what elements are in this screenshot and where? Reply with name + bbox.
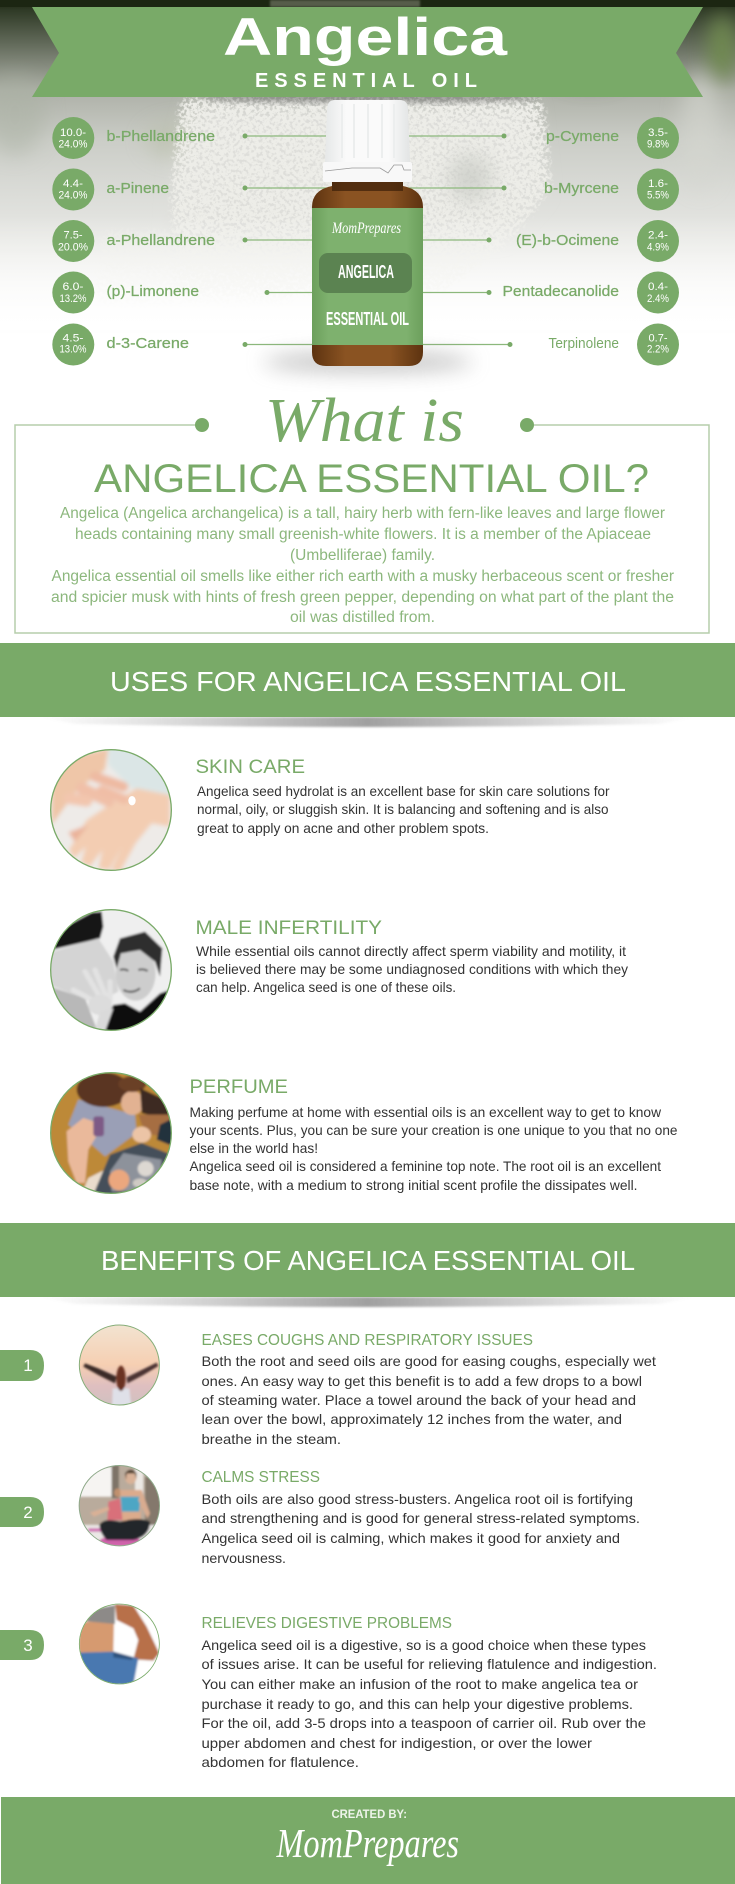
compound: p-Cymene: p-Cymene bbox=[546, 128, 619, 145]
icon: essential oil bottle bbox=[263, 100, 473, 372]
text: of steaming water. Place a towel around the back of your head and bbox=[202, 1393, 636, 1408]
compound: a-Pinene: 4.4- bbox=[63, 178, 83, 190]
description: and spicier musk with hints of fresh green pepper, depending on what part of the plant the bbox=[51, 589, 674, 606]
text: purchase it ready to go, and this can help your digestive problems. bbox=[202, 1697, 633, 1712]
use: male infertility bbox=[45, 905, 628, 1038]
use: perfume bbox=[45, 1068, 678, 1201]
compound: (E)-b-Ocimene: (E)-b-Ocimene bbox=[516, 232, 619, 249]
photo: hands applying cream bbox=[50, 749, 172, 871]
text: Angelica seed oil is a digestive, so is a good choice when these types bbox=[202, 1638, 646, 1653]
compound: p-Cymene: 3.5- bbox=[648, 127, 668, 139]
text bbox=[190, 1105, 678, 1193]
number tab 3 bbox=[0, 1630, 44, 1660]
compound: a-Phellandrene bbox=[52, 220, 215, 262]
connector lines bbox=[242, 134, 512, 347]
compound: (p)-Limonene: 6.0- bbox=[62, 281, 84, 293]
compound: b-Myrcene: 1.6- bbox=[648, 178, 668, 190]
compound: b-Phellandrene bbox=[52, 117, 215, 159]
description: oil was distilled from. bbox=[290, 609, 435, 626]
text: ones. An easy way to get this benefit is to add a few drops to a bowl bbox=[202, 1374, 642, 1389]
description: heads containing many small greenish-white flowers. It is a member of the Apiaceae bbox=[75, 526, 651, 543]
compound: (p)-Limonene: 13.2% bbox=[60, 293, 87, 305]
compound: Terpinolene: 0.7- bbox=[648, 332, 668, 344]
compound: (p)-Limonene bbox=[52, 272, 199, 314]
heading: MALE INFERTILITY bbox=[196, 917, 382, 939]
text: can help. Angelica seed is one of these oils. bbox=[196, 980, 456, 995]
compound: Pentadecanolide bbox=[502, 272, 679, 314]
compound: a-Phellandrene: a-Phellandrene bbox=[106, 232, 215, 249]
left compound list bbox=[52, 117, 215, 366]
text: and strengthening and is good for general stress-related symptoms. bbox=[202, 1511, 640, 1526]
compound: b-Phellandrene: b-Phellandrene bbox=[106, 128, 215, 145]
number tab 2 bbox=[0, 1497, 44, 1527]
number tab 3: 3 bbox=[23, 1636, 33, 1655]
text bbox=[202, 1354, 656, 1447]
compound: b-Phellandrene: 24.0% bbox=[58, 138, 88, 150]
heading: ANGELICA ESSENTIAL OIL? bbox=[94, 457, 649, 501]
compound: p-Cymene bbox=[546, 117, 679, 159]
compound: b-Myrcene bbox=[544, 168, 679, 210]
description: (Umbelliferae) family. bbox=[290, 547, 435, 564]
compound: Pentadecanolide: Pentadecanolide bbox=[502, 283, 619, 300]
compound: d-3-Carene: 13.0% bbox=[60, 344, 87, 356]
text bbox=[202, 1492, 640, 1566]
benefit 3: relieves digestive problems bbox=[0, 1603, 657, 1770]
flower cluster bbox=[90, 92, 558, 310]
text: your scents. Plus, you can be sure your creation is one unique to you that no one bbox=[190, 1123, 678, 1138]
text: Angelica seed oil is calming, which makes it good for anxiety and bbox=[202, 1531, 620, 1546]
section header: benefits bbox=[0, 1223, 735, 1307]
compound: b-Myrcene: b-Myrcene bbox=[544, 180, 619, 197]
text: You can either make an infusion of the root to make angelica tea or bbox=[202, 1677, 638, 1692]
text: normal, oily, or sluggish skin. It is balancing and softening and is also bbox=[197, 802, 608, 817]
photo: woman with perfume bbox=[50, 1072, 172, 1194]
compound: b-Myrcene: 5.5% bbox=[647, 190, 669, 202]
footer bbox=[1, 1797, 735, 1884]
compound: d-3-Carene: 4.5- bbox=[62, 332, 84, 344]
text: breathe in the steam. bbox=[202, 1432, 341, 1447]
bottle name plate bbox=[319, 253, 412, 293]
compound: Pentadecanolide: 0.4- bbox=[648, 281, 668, 293]
compound: a-Pinene bbox=[52, 168, 169, 210]
text bbox=[197, 784, 610, 836]
right compound list bbox=[502, 117, 679, 366]
use: skin care bbox=[45, 745, 610, 878]
bottle subtitle: ESSENTIAL OIL bbox=[326, 309, 409, 329]
photo: woman at sunrise bbox=[77, 1323, 163, 1407]
compound: (E)-b-Ocimene bbox=[516, 220, 679, 262]
photo: waist in loose jeans bbox=[77, 1603, 163, 1687]
text: For the oil, add 3-5 drops into a teaspoon of carrier oil. Rub over the bbox=[202, 1716, 646, 1731]
compound: a-Phellandrene: 7.5- bbox=[64, 230, 83, 242]
text: Angelica seed oil is considered a feminine top note. The root oil is an excellent bbox=[190, 1159, 661, 1174]
text: is believed there may be some undiagnosed conditions with which they bbox=[196, 962, 628, 977]
compound: d-3-Carene: d-3-Carene bbox=[106, 335, 189, 352]
compound: p-Cymene: 9.8% bbox=[647, 138, 669, 150]
benefit 1: eases coughs bbox=[0, 1323, 656, 1447]
section header: benefits: BENEFITS OF ANGELICA ESSENTIAL OIL bbox=[101, 1245, 635, 1276]
photo: man with pregnant partner bbox=[50, 909, 172, 1031]
compound: a-Pinene: a-Pinene bbox=[106, 180, 169, 197]
bottle name plate: ANGELICA bbox=[338, 261, 394, 282]
text: else in the world has! bbox=[190, 1141, 318, 1156]
benefit 2: calms stress bbox=[0, 1463, 640, 1566]
number tab 1 bbox=[0, 1350, 44, 1381]
text: nervousness. bbox=[202, 1551, 286, 1566]
text: While essential oils cannot directly affect sperm viability and motility, it bbox=[196, 944, 626, 959]
number tab 2: 2 bbox=[23, 1503, 33, 1522]
compound: a-Pinene: 24.0% bbox=[58, 190, 88, 202]
compound: Terpinolene bbox=[548, 324, 679, 366]
compound: (E)-b-Ocimene: 2.4- bbox=[648, 230, 668, 242]
compound: (E)-b-Ocimene: 4.9% bbox=[647, 242, 669, 254]
description bbox=[51, 505, 674, 626]
text: Both oils are also good stress-busters. Angelica root oil is fortifying bbox=[202, 1492, 633, 1507]
compound: Terpinolene: Terpinolene bbox=[548, 335, 619, 352]
script heading: What is bbox=[265, 387, 464, 455]
text bbox=[202, 1638, 657, 1770]
compound: a-Phellandrene: 20.0% bbox=[58, 242, 88, 254]
text: base note, with a medium to strong initial scent profile the dissipates well. bbox=[190, 1178, 638, 1193]
text: of issues arise. It can be useful for relieving flatulence and indigestion. bbox=[202, 1657, 657, 1672]
compound: d-3-Carene bbox=[52, 324, 189, 366]
heading: RELIEVES DIGESTIVE PROBLEMS bbox=[202, 1615, 452, 1632]
bottle brand: MomPrepares bbox=[331, 220, 401, 237]
panel: what is angelica bbox=[15, 387, 709, 633]
text: Both the root and seed oils are good for easing coughs, especially wet bbox=[202, 1354, 656, 1369]
section header: uses: USES FOR ANGELICA ESSENTIAL OIL bbox=[110, 666, 626, 697]
text: Angelica seed hydrolat is an excellent base for skin care solutions for bbox=[197, 784, 610, 799]
photo: women meditating bbox=[78, 1465, 160, 1546]
text: Making perfume at home with essential oils is an excellent way to get to know bbox=[190, 1105, 661, 1120]
text bbox=[196, 944, 628, 995]
compound: Terpinolene: 2.2% bbox=[647, 344, 669, 356]
heading: SKIN CARE bbox=[196, 756, 305, 778]
description: Angelica (Angelica archangelica) is a tall, hairy herb with fern-like leaves and large flower bbox=[60, 505, 665, 522]
number tab 1: 1 bbox=[23, 1356, 33, 1375]
compound: (p)-Limonene: (p)-Limonene bbox=[106, 283, 199, 300]
text: abdomen for flatulence. bbox=[202, 1755, 359, 1770]
description: Angelica essential oil smells like either rich earth with a musky herbaceous scent or fresher bbox=[52, 568, 674, 585]
text: lean over the bowl, approximately 12 inches from the water, and bbox=[202, 1412, 622, 1427]
section header: uses bbox=[0, 643, 735, 727]
heading: PERFUME bbox=[190, 1076, 288, 1098]
text: great to apply on acne and other problem spots. bbox=[197, 821, 489, 836]
brand logo: MomPrepares bbox=[276, 1820, 459, 1866]
text: upper abdomen and chest for indigestion, or over the lower bbox=[202, 1736, 593, 1751]
compound: b-Phellandrene: 10.0- bbox=[60, 127, 86, 139]
subtitle: ESSENTIAL OIL bbox=[255, 70, 477, 92]
title: Angelica bbox=[223, 8, 508, 67]
compound: Pentadecanolide: 2.4% bbox=[647, 293, 669, 305]
heading: CALMS STRESS bbox=[202, 1469, 320, 1486]
title banner bbox=[32, 7, 703, 103]
heading: EASES COUGHS AND RESPIRATORY ISSUES bbox=[202, 1332, 533, 1349]
hero background: blurred photo of angelica flowers bbox=[0, 0, 735, 335]
credit label: CREATED BY: bbox=[332, 1809, 407, 1821]
